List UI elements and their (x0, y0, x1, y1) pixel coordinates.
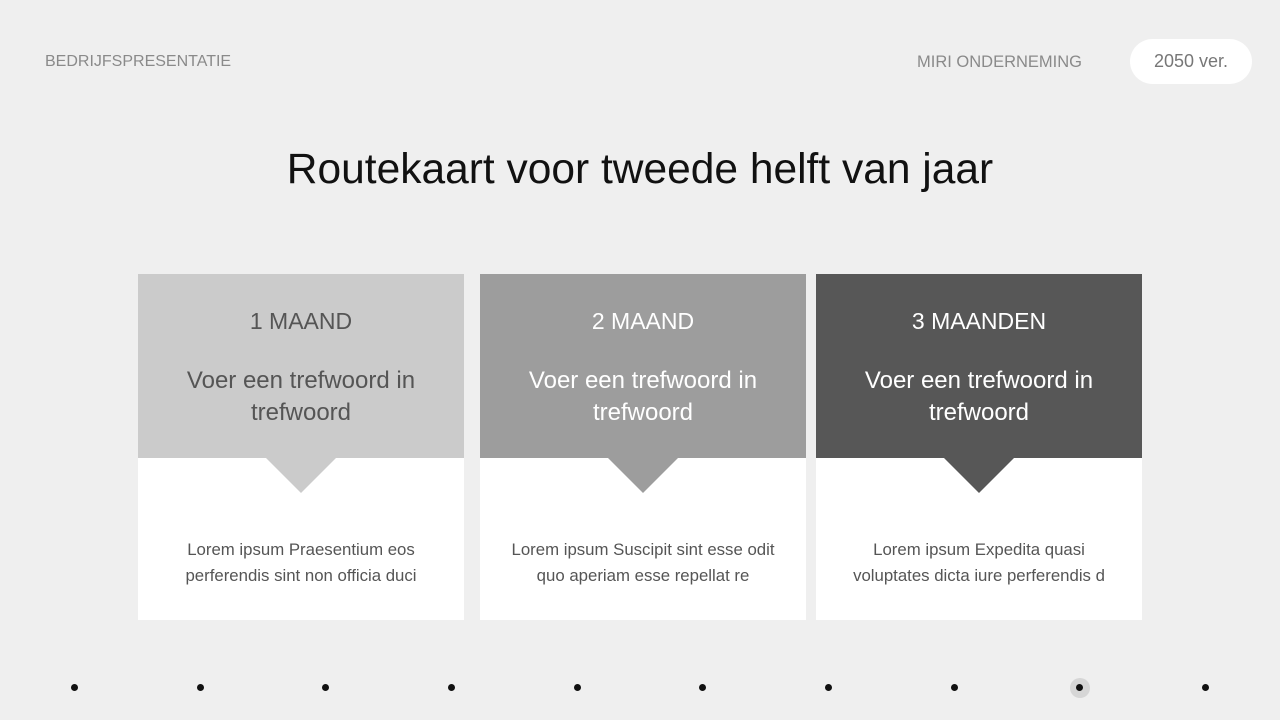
card 3: voluptates dicta iure perferendis d (853, 566, 1105, 585)
card 2: Lorem ipsum Suscipit sint esse odit (511, 540, 775, 559)
card 2: quo aperiam esse repellat re (537, 566, 749, 585)
card 3: Voer een trefwoord in (865, 367, 1093, 394)
header left: BEDRIJFSPRESENTATIE (45, 53, 231, 70)
card 1: Lorem ipsum Praesentium eos (187, 540, 415, 559)
card 3: Lorem ipsum Expedita quasi (873, 540, 1085, 559)
card 3 (816, 274, 1142, 620)
card 1: trefwoord (251, 399, 351, 426)
card 1: Voer een trefwoord in (187, 367, 415, 394)
dot highlight (1070, 678, 1090, 698)
version pill: 2050 ver. (1154, 51, 1228, 71)
card 3: trefwoord (929, 399, 1029, 426)
header right: MIRI ONDERNEMING (917, 53, 1082, 71)
card 1: 1 MAAND (250, 308, 352, 334)
card 2: trefwoord (593, 399, 693, 426)
card 2 (480, 274, 806, 620)
title: Routekaart voor tweede helft van jaar (287, 146, 993, 193)
card 2: 2 MAAND (592, 308, 694, 334)
card 1 (138, 274, 464, 620)
card 2: Voer een trefwoord in (529, 367, 757, 394)
card 1: perferendis sint non officia duci (185, 566, 417, 585)
card 3: 3 MAANDEN (912, 308, 1046, 334)
version pill (1130, 39, 1252, 84)
